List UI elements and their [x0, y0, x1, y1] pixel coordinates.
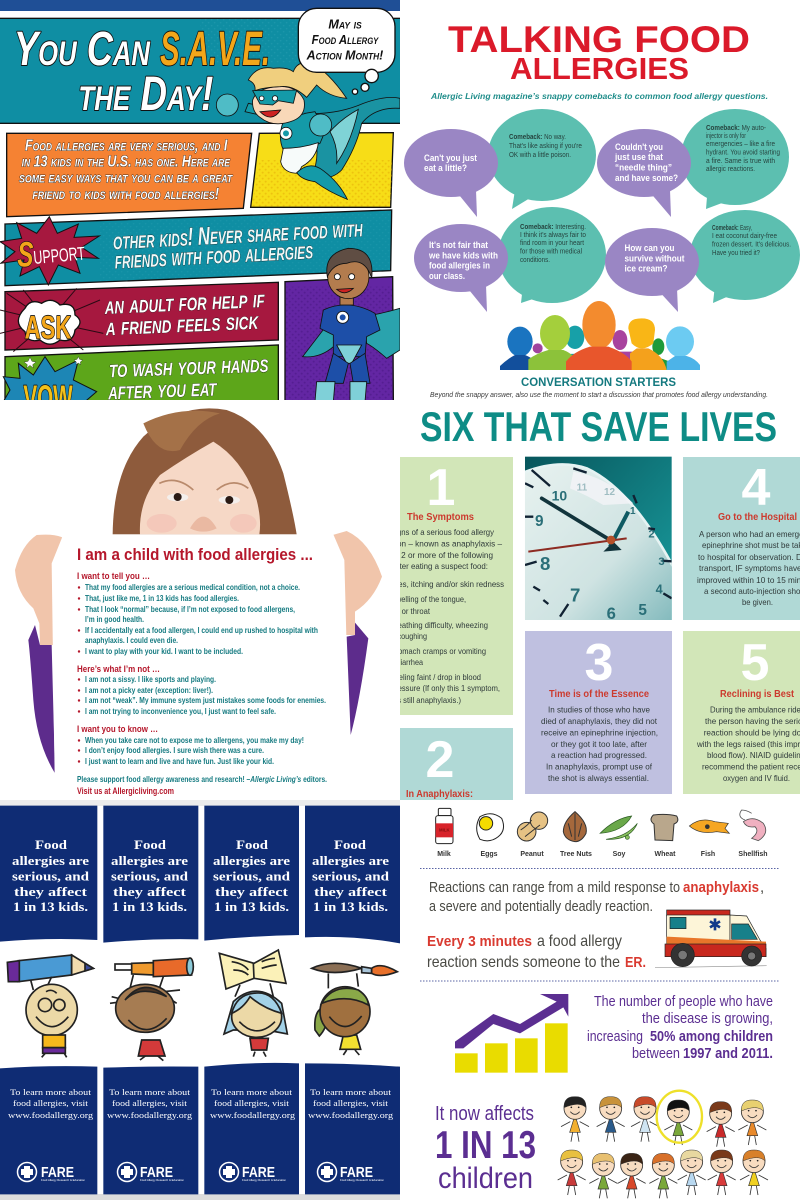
panel: FARE bookmarks [0, 800, 400, 1200]
bookmark 1 text: www.foodallergy.org [8, 1111, 93, 1120]
image: clock: 10 [552, 488, 567, 504]
heading: sign title: I am a child with food allergies ... [77, 545, 313, 564]
panel: Talking Food Allergies [400, 0, 800, 400]
speech bubble pair 1: That's like asking if you're [509, 143, 582, 150]
speech bubble pair 2: hydrant. You avoid starting [706, 150, 780, 156]
FARE logos: Food Allergy Research & Education [340, 1178, 385, 1182]
speech bubble pair 3: find room in your heart [520, 240, 584, 247]
speech bubble pair 4 [605, 210, 800, 312]
illustration: child holding sign [15, 408, 382, 800]
bookmark 2 text: www.foodallergy.org [107, 1111, 192, 1120]
bookmark 4 text: allergies are [312, 853, 389, 868]
card 5: Reclining is Best: 5 [741, 634, 769, 692]
text block: reactions: anaphylaxis [683, 879, 759, 896]
card 1: The Symptoms [400, 457, 513, 715]
image: clock: 9 [535, 513, 544, 530]
speech bubble pair 2 [597, 109, 789, 217]
illustration: kid with telescope [110, 958, 193, 1061]
bookmark 4 text: 1 in 13 kids. [313, 899, 388, 914]
text block: Here's what I'm not: I am not “weak”. My immune system just mistakes some foods for enemies. [85, 695, 326, 705]
icon: milk: MILK [439, 828, 450, 833]
illustration: boy superhero [303, 248, 400, 402]
card 1: The Symptoms: Breathing difficulty, wheezing [390, 620, 488, 630]
bookmark 1 text: allergies are [12, 853, 89, 868]
bookmark 2 text: Food [134, 837, 167, 852]
heading: Conversation Starters: CONVERSATION STARTERS [521, 375, 676, 389]
card 4: Go to the Hospital: be given. [742, 597, 773, 607]
text block: growth [587, 993, 773, 1062]
bookmark 3 text: www.foodallergy.org [210, 1111, 295, 1120]
card 1: The Symptoms: lips or throat [388, 606, 431, 616]
text block: 1 in 13: children [438, 1162, 533, 1195]
card 4: Go to the Hospital [683, 457, 800, 620]
card 1: The Symptoms: reaction – known as anaphylaxis – [377, 539, 502, 549]
caption: Beyond the snappy answer, also use the moment to start a discussion that promotes food allergy understanding. [430, 390, 768, 399]
bookmark 1 text: food allergies, visit [13, 1099, 89, 1108]
speech bubble pair 2: and have some? [615, 173, 678, 183]
panel: Ask: a friend feels sick [104, 307, 260, 341]
FARE logos: FARE [340, 1164, 373, 1181]
icon: peanut [517, 812, 548, 841]
text block: I want to tell you: I want to play with your kid. I want to be included. [85, 646, 243, 656]
speech bubble pair 2: “needle thing” [615, 162, 672, 172]
text block: Here's what I'm not: I am not trying to inconvenience you, I just want to feel safe. [85, 706, 276, 716]
icon labels: Milk [437, 851, 451, 858]
speech bubble pair 3: we have kids with [428, 250, 498, 260]
icon: Vow burst: VOW [23, 378, 73, 419]
bookmark 2 text: 1 in 13 kids. [112, 899, 187, 914]
text block: growth: the disease is growing, [642, 1010, 773, 1027]
panel: orange intro: friend to kids with food allergies! [32, 186, 220, 203]
bookmark 1 text: they affect [14, 884, 88, 899]
card 1: The Symptoms: or diarrhea [388, 657, 423, 667]
speech bubble pair 2: injector is only for [706, 133, 746, 140]
bookmark 2 text: food allergies, visit [112, 1099, 188, 1108]
bookmark 2 text [107, 837, 192, 1120]
speech bubble pair 3: I think it's always fair to [520, 232, 586, 239]
image: clock: 5 [638, 602, 647, 619]
text block: I want to tell you: I want to tell you … [77, 571, 150, 581]
panel: orange intro: in 13 kids in the U.S. has one. Here are [22, 154, 231, 171]
text block: I want to tell you: That, just like me, 1 in 13 kids has food allergies. [85, 593, 239, 603]
icon labels: Soy [613, 851, 626, 858]
FARE logos: FARE [140, 1164, 173, 1181]
text block: every 3 minutes: reaction sends someone to the [427, 954, 620, 971]
icon labels [437, 851, 768, 858]
bookmark 4 text: www.foodallergy.org [308, 1111, 393, 1120]
icon labels: Wheat [654, 851, 676, 858]
card 1: The Symptoms: Swelling of the tongue, [391, 594, 466, 604]
panel: Support [0, 210, 392, 286]
FARE logos: Food Allergy Research & Education [41, 1178, 86, 1182]
FARE logos: FARE [242, 1164, 275, 1181]
heading: You Can: You Can [14, 23, 151, 76]
heading: the Day: the Day! [78, 68, 213, 121]
image: clock: 1 [630, 506, 636, 517]
bookmark 4 text: To learn more about [310, 1088, 392, 1097]
icon labels: Eggs [480, 851, 498, 858]
title banner [0, 18, 402, 123]
bookmark panels [0, 806, 400, 1194]
speech bubble pair 1: OK with a little poison. [509, 152, 571, 159]
text block: I want to tell you: If I accidentally eat a food allergen, I could end up rushed to hospital with [85, 625, 318, 635]
text block: reactions: , [760, 879, 764, 896]
image: clock [520, 457, 677, 623]
speech bubble pair 3: for those with medical [520, 248, 582, 256]
card 2: In Anaphylaxis [400, 728, 513, 800]
card 3: Time is of the Essence: receive an epinephrine injection, [541, 728, 658, 738]
text block: Here's what I'm not [77, 664, 326, 716]
text block: 1 in 13: 1 IN 13 [435, 1124, 536, 1167]
icon: eggs [477, 814, 504, 841]
bookmark 3 text: allergies are [213, 853, 290, 868]
image: clock: 3 [658, 556, 665, 568]
icon: tree nut [563, 812, 586, 842]
bookmark 4 text: serious, and [312, 869, 390, 884]
panel: orange intro: some easy ways that you can be a great [19, 170, 233, 187]
text block: every 3 minutes: a food allergy [537, 933, 622, 950]
panel: Vow: to wash your hands [109, 350, 269, 383]
icon labels: Fish [701, 851, 715, 858]
illustration: kid with pencil [7, 955, 93, 1057]
panel: I am a child with food allergies [0, 400, 400, 800]
callout: thought bubble: Action Month! [306, 47, 384, 62]
heading: Talking Food: TALKING FOOD [448, 19, 750, 60]
text block: reactions: a severe and potentially deadly reaction. [429, 898, 653, 915]
callout: thought bubble [298, 8, 395, 94]
text block: 1 in 13: It now affects [435, 1103, 534, 1125]
card 5: Reclining is Best: Reclining is Best [720, 689, 795, 700]
text block: I want you to know: I want you to know … [77, 724, 158, 734]
text block: I want you to know: I just want to learn and live and have fun. Just like your kid. [85, 756, 274, 766]
text block: I want to tell you: That my food allergies are a serious medical condition, not a choice. [85, 582, 300, 592]
speech bubble pair 4: frozen dessert. It's delicious. [712, 242, 791, 248]
panel: facts [400, 800, 800, 1200]
heading: S.A.V.E.: S.A.V.E. [160, 23, 270, 76]
bookmark 4 text: food allergies, visit [313, 1099, 389, 1108]
speech bubble pair 1: Can't you just [424, 153, 477, 163]
speech bubble pair 3: food allergies in [429, 260, 490, 270]
bookmark 1 text: Food [35, 837, 68, 852]
text block: growth: 1997 and 2011. [683, 1045, 773, 1062]
bookmark 4 text: they affect [314, 884, 388, 899]
speech bubble pair 4: Have you tried it? [712, 250, 760, 257]
text block: I want you to know: I don’t enjoy food allergies. I sure wish there was a cure. [85, 745, 264, 755]
image: clock: 8 [540, 553, 550, 574]
card 5: Reclining is Best [683, 631, 800, 794]
speech bubble pair 2: just use that [614, 152, 663, 162]
card 1: The Symptoms: The Symptoms [407, 512, 474, 523]
speech bubble pair 4: I eat coconut dairy-free [712, 233, 777, 240]
chart: rising bars with arrow [455, 994, 568, 1073]
text block: every 3 minutes [427, 933, 646, 971]
heading: Allergies: ALLERGIES [510, 51, 689, 86]
FARE logos [18, 1162, 385, 1182]
FARE logos: Food Allergy Research & Education [242, 1178, 287, 1182]
speech bubble pair 1 [404, 109, 596, 217]
image: clock: 2 [648, 528, 655, 540]
bookmark 3 text: To learn more about [211, 1088, 293, 1097]
speech bubble pair 2: a fire. Same is true with [706, 158, 775, 165]
callout: thought bubble: Food Allergy [312, 32, 379, 47]
panel: yellow halftone [251, 133, 393, 207]
bookmark 4 text [308, 837, 393, 1120]
icon row: common food allergens [436, 808, 768, 858]
panel: Ask [0, 282, 278, 352]
image: clock: 6 [607, 604, 616, 623]
bookmark 1 text: 1 in 13 kids. [13, 899, 88, 914]
bookmark 3 text: Food [236, 837, 269, 852]
panel: orange intro [7, 133, 252, 217]
card 1: The Symptoms: pressure (If only this 1 symptom, [391, 683, 500, 693]
icon: fish [689, 820, 729, 833]
bookmark 2 text: allergies are [111, 853, 188, 868]
speech bubble pair 4: ice cream? [624, 264, 668, 274]
bookmark 2 text: they affect [113, 884, 187, 899]
speech bubble pair 2: emergencies – like a fire [706, 141, 775, 148]
card 3: Time is of the Essence: a reaction had progressed. [551, 750, 647, 760]
card 3: Time is of the Essence: 3 [585, 634, 613, 692]
card 3: Time is of the Essence: died of anaphylaxis, they did not [541, 716, 658, 726]
speech bubble pair 3: Comeback: Interesting. [520, 224, 586, 231]
image: clock: 12 [604, 487, 616, 498]
card 1: The Symptoms: it's still anaphylaxis.) [392, 695, 461, 705]
icon labels: Peanut [520, 851, 544, 858]
icon: Ask cloud [18, 300, 80, 345]
text block: I want to tell you: anaphylaxis. I could even die. [85, 635, 178, 645]
text block: I want you to know [77, 724, 304, 766]
illustration: girl superhero [216, 62, 400, 199]
text block: I want to tell you: That I look “normal” because, if I’m not exposed to food allergens, [85, 604, 295, 614]
speech bubble pair 2: Comeback: My auto- [706, 125, 767, 132]
icon labels: Tree Nuts [560, 851, 592, 858]
panel: Support: friends with food allergies [114, 236, 314, 275]
bookmark 3 text: food allergies, visit [214, 1099, 290, 1108]
icon: Support burst: UPPORT [33, 243, 86, 268]
icon labels: Shellfish [738, 851, 768, 858]
speech bubble pair 1: eat a little? [424, 163, 467, 173]
bookmark 2 text: serious, and [111, 869, 189, 884]
text block: 1 in 13 [435, 1103, 536, 1195]
FARE logos: FARE [41, 1164, 74, 1181]
card 1: The Symptoms: Signs of a serious food allergy [390, 527, 495, 537]
panel: Six That Save Lives [400, 412, 800, 800]
speech bubble pair 3: conditions. [520, 257, 550, 264]
text block: closing note [77, 774, 327, 796]
speech bubble pair 2: Couldn't you [615, 142, 663, 152]
text block: I want to tell you [77, 571, 318, 656]
card 3: Time is of the Essence: In anaphylaxis, prompt use of [546, 762, 653, 772]
text block: growth: 50% among children [650, 1028, 773, 1045]
icon: Ask cloud: ASK [25, 308, 72, 345]
card 5: Reclining is Best: oxygen and IV fluid. [723, 773, 790, 783]
card 1: The Symptoms: 1 [427, 459, 455, 517]
icon: soy [600, 816, 637, 839]
panel: Ask: an adult for help if [103, 285, 266, 320]
text block: I want you to know: When you take care not to expose me to allergens, you make my day! [85, 735, 304, 745]
speech bubble pair 1: Comeback: No way. [509, 134, 566, 141]
image: clock: 7 [570, 585, 580, 606]
illustration: group of people silhouettes [500, 301, 700, 370]
text block: every 3 minutes: Every 3 minutes [427, 933, 532, 950]
bookmark 3 text [210, 837, 295, 1120]
card 4: Go to the Hospital: 4 [742, 459, 771, 517]
icon: Support burst [0, 217, 99, 285]
panel: You Can S.A.V.E. the Day comic [0, 0, 402, 419]
speech bubble pair 4: survive without [624, 254, 684, 264]
panel: purple halftone [285, 277, 393, 402]
text block: Here's what I'm not: I am not a picky eater (exception: liver!). [85, 685, 213, 695]
bookmark 1 text: To learn more about [10, 1088, 92, 1097]
FARE logos: Food Allergy Research & Education [140, 1178, 185, 1182]
panel: Support: other kids! Never share food with [112, 214, 364, 255]
bookmark 3 text: 1 in 13 kids. [214, 899, 289, 914]
card 1: The Symptoms: Stomach cramps or vomiting [391, 646, 486, 656]
speech bubble pair 3 [414, 207, 606, 312]
speech bubble pair 3: our class. [429, 271, 465, 281]
card 3: Time is of the Essence: In studies of those who have [548, 705, 650, 715]
card 1: The Symptoms: after eating a suspect food: [393, 561, 488, 571]
text block: closing note: Visit us at Allergicliving.com [77, 786, 174, 796]
illustration: kid with book [219, 950, 287, 1057]
panel: Vow: after you eat [107, 374, 218, 405]
image: clock: 11 [577, 483, 588, 494]
text block: Here's what I'm not: Here’s what I’m not … [77, 664, 160, 674]
illustration: ambulance [655, 910, 767, 968]
text block: growth: between [632, 1045, 680, 1062]
icon: Support burst: S [17, 236, 33, 275]
card 1: The Symptoms: is 2 or more of the following [393, 550, 493, 560]
subtitle: Allergic Living magazine’s snappy comebacks to common food allergy questions. [430, 91, 768, 101]
illustration: crowd of children with one circled [558, 1091, 768, 1198]
text block: closing note: Please support food allergy awareness and research! –Allergic Living’s editors. [77, 774, 327, 784]
speech bubble pair 3: It's not fair that [429, 240, 488, 250]
panel: Vow [2, 344, 279, 400]
bookmark 1 text [8, 837, 93, 1120]
icon: shellfish [740, 810, 766, 841]
card 2: In Anaphylaxis: 2 [426, 731, 454, 789]
speech bubble pair 4: Comeback: Easy, [712, 225, 752, 232]
bookmark 1 text: serious, and [12, 869, 90, 884]
bookmark 4 text: Food [334, 837, 367, 852]
text block: I want to tell you: I’m in good health. [85, 614, 144, 624]
image: clock: 4 [656, 582, 663, 596]
card 1: The Symptoms: Hives, itching and/or skin redness [387, 579, 504, 589]
callout: thought bubble: May is [328, 16, 362, 31]
card 1: The Symptoms: or coughing [389, 631, 427, 641]
text block: every 3 minutes: ER. [625, 954, 646, 971]
speech bubble pair 2: allergic reactions. [706, 166, 755, 173]
text block: reactions [429, 879, 764, 915]
card 3: Time is of the Essence: or they got it too late, after [551, 739, 647, 749]
card 1: The Symptoms: Feeling faint / drop in blood [390, 672, 481, 682]
icon: milk [436, 808, 453, 844]
panel: orange intro: Food allergies are very serious, and I [25, 138, 228, 155]
card 2: In Anaphylaxis: In Anaphylaxis: [406, 789, 473, 800]
illustration: kid with paintbrush [312, 963, 397, 1055]
card 3: Time is of the Essence: Time is of the Essence [549, 689, 649, 700]
icon: wheat bread [651, 814, 678, 841]
speech bubble pair 4: How can you [624, 243, 674, 253]
bookmark 2 text: To learn more about [109, 1088, 191, 1097]
card 3: Time is of the Essence: the shot is always essential. [548, 773, 649, 783]
text block: reactions: Reactions can range from a mild response to [429, 879, 680, 896]
text block: growth: increasing [587, 1028, 643, 1045]
text block: Here's what I'm not: I am not a sissy. I like sports and playing. [85, 674, 216, 684]
icon: Vow burst [2, 356, 98, 400]
card 3: Time is of the Essence [525, 631, 672, 794]
bookmark 3 text: they affect [215, 884, 289, 899]
bookmark 3 text: serious, and [213, 869, 291, 884]
